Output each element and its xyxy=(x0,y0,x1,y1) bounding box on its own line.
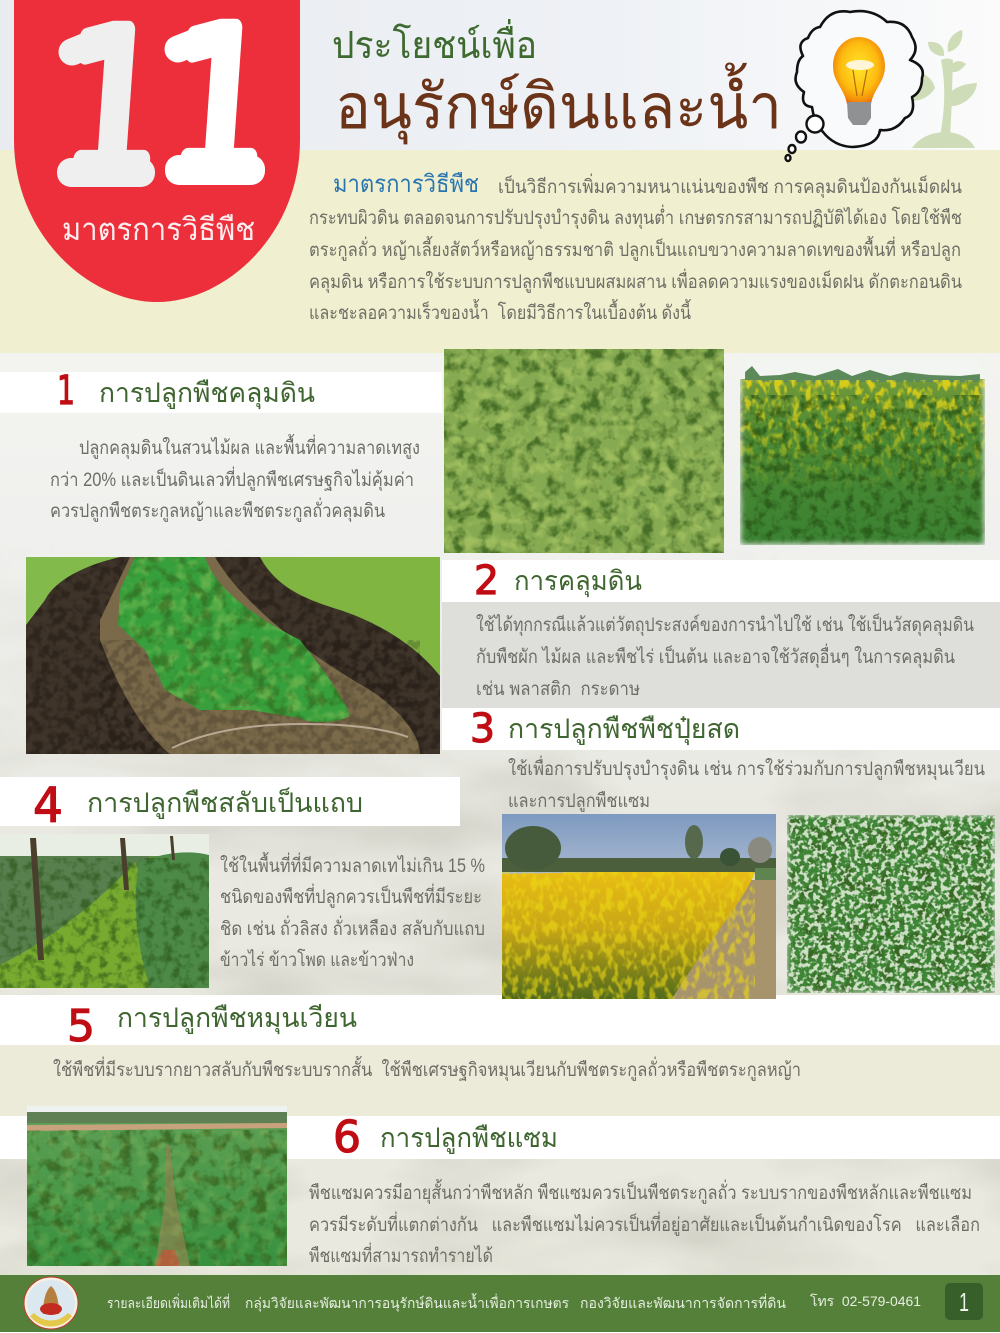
photo: leafy ground cover xyxy=(444,349,724,553)
photo: mulched planting row xyxy=(26,557,440,754)
photo: intercropped cassava field xyxy=(27,1106,287,1266)
bulb filament xyxy=(853,70,867,96)
section 2 text xyxy=(442,602,1000,708)
text block: introduction: มาตรการวิธีพืช xyxy=(333,171,479,198)
bulb glass xyxy=(833,37,885,104)
section 6 heading: การปลูกพืชแซม xyxy=(380,1123,558,1154)
section 1 heading: 1 xyxy=(57,368,75,414)
section 2 heading: 2 xyxy=(474,558,499,604)
section 4 text: ข้าวไร่ ข้าวโพด และข้าวฟ่าง xyxy=(220,948,414,971)
big numeral 11 xyxy=(57,0,276,224)
section 5 heading: 5 xyxy=(67,1001,95,1052)
shield caption: มาตรการวิธีพืช xyxy=(62,212,255,247)
irrigation hose xyxy=(172,724,408,748)
text block: introduction: เป็นวิธีการเพิ่มความหนาแน่นของพืช การคลุมดินป้องกันเม็ดฝน xyxy=(498,173,962,199)
background: misty lower area xyxy=(0,353,1000,1275)
bubble trail xyxy=(786,116,824,161)
section 4 heading: การปลูกพืชสลับเป็นแถบ xyxy=(87,785,363,819)
photo: yellow flowering field xyxy=(502,814,776,999)
section 5 heading: การปลูกพืชหมุนเวียน xyxy=(117,1003,357,1035)
section 3 text: และการปลูกพืชแซม xyxy=(508,791,650,812)
mulch mound xyxy=(100,557,420,754)
section 5 text: ใช้พืชที่มีระบบรากยาวสลับกับพืชระบบรากสั้น ใช้พืชเศรษฐกิจหมุนเวียนกับพืชตระกูลถั่วหรือพืชตระกูลหญ้า xyxy=(53,1056,801,1082)
section 1 heading: การปลูกพืชคลุมดิน xyxy=(99,378,315,410)
section 1 heading xyxy=(0,368,442,414)
photo: sunn hemp field xyxy=(740,366,985,545)
section 4 text xyxy=(220,852,485,971)
section 4 heading: 4 xyxy=(33,778,63,834)
photo: white flowering green crop xyxy=(783,811,999,997)
icon: agency seal xyxy=(24,1277,78,1329)
section 3 text xyxy=(508,755,985,812)
section 6 heading xyxy=(0,1112,1000,1163)
photo: alley cropping xyxy=(0,834,209,988)
text block: introduction: และชะลอความเร็วของน้ำ โดยมีวิธีการในเบื้องต้น ดังนี้ xyxy=(309,299,691,324)
section 3 heading: 3 xyxy=(470,706,495,752)
footer text: กลุ่มวิจัยและพัฒนาการอนุรักษ์ดินและน้ำเพื่อการเกษตร xyxy=(245,1293,569,1312)
footer text: รายละเอียดเพิ่มเติมได้ที่ xyxy=(107,1294,230,1311)
planted strip xyxy=(110,557,360,727)
title line 2: อนุรักษ์ดินและน้ำ xyxy=(335,62,782,144)
icon: thought bubble with light bulb xyxy=(786,11,923,161)
section 2 heading: การคลุมดิน xyxy=(514,566,642,598)
section 4 text: ชิด เช่น ถั่วลิสง ถั่วเหลือง สลับกับแถบ xyxy=(220,915,485,940)
section 1 text xyxy=(50,434,420,523)
section 4 text: ใช้ในพื้นที่ที่มีความลาดเทไม่เกิน 15 % xyxy=(220,852,485,877)
section 6 text: พืชแซมที่สามารถทำรายได้ xyxy=(309,1242,493,1267)
section 6 text xyxy=(309,1179,980,1267)
section 2 text: เช่น พลาสติก กระดาษ xyxy=(476,679,640,700)
panel: red shield with number 11 xyxy=(14,0,300,302)
bulb base xyxy=(847,102,871,125)
background: cream intro band xyxy=(0,150,1000,353)
section 1 text: กว่า 20% และเป็นดินเลวที่ปลูกพืชเศรษฐกิจไม่คุ้มค่า xyxy=(50,466,414,492)
icon: pale plant xyxy=(905,30,977,148)
page number badge xyxy=(945,1283,983,1320)
bulb highlight xyxy=(846,60,874,70)
footer text: กองวิจัยและพัฒนาการจัดการที่ดิน xyxy=(580,1294,786,1311)
section 6 heading: 6 xyxy=(333,1112,361,1163)
background: top sky xyxy=(0,0,1000,150)
footer text xyxy=(107,1293,921,1312)
section 4 heading xyxy=(0,777,460,834)
section 4 text: ชนิดของพืชที่ปลูกควรเป็นพืชที่มีระยะ xyxy=(220,883,482,908)
section 3 heading: การปลูกพืชพืชปุ๋ยสด xyxy=(508,714,740,746)
footer text: โทร 02-579-0461 xyxy=(810,1293,921,1309)
section 1 text: ควรปลูกพืชตระกูลหญ้าและพืชตระกูลถั่วคลุมดิน xyxy=(50,497,385,523)
section 1 text: ปลูกคลุมดินในสวนไม้ผล และพื้นที่ความลาดเทสูง xyxy=(79,434,420,460)
text block: introduction xyxy=(309,171,962,324)
page number badge: 1 xyxy=(959,1287,969,1317)
grass upper left xyxy=(26,557,120,625)
grass upper right xyxy=(260,557,440,676)
section 3 heading xyxy=(442,706,1000,752)
section 2 heading xyxy=(442,558,1000,604)
section 5 heading xyxy=(0,995,1000,1052)
footer bar xyxy=(0,1275,1000,1332)
section 5 text xyxy=(0,1045,1000,1116)
title line 1: ประโยชน์เพื่อ xyxy=(332,19,537,67)
